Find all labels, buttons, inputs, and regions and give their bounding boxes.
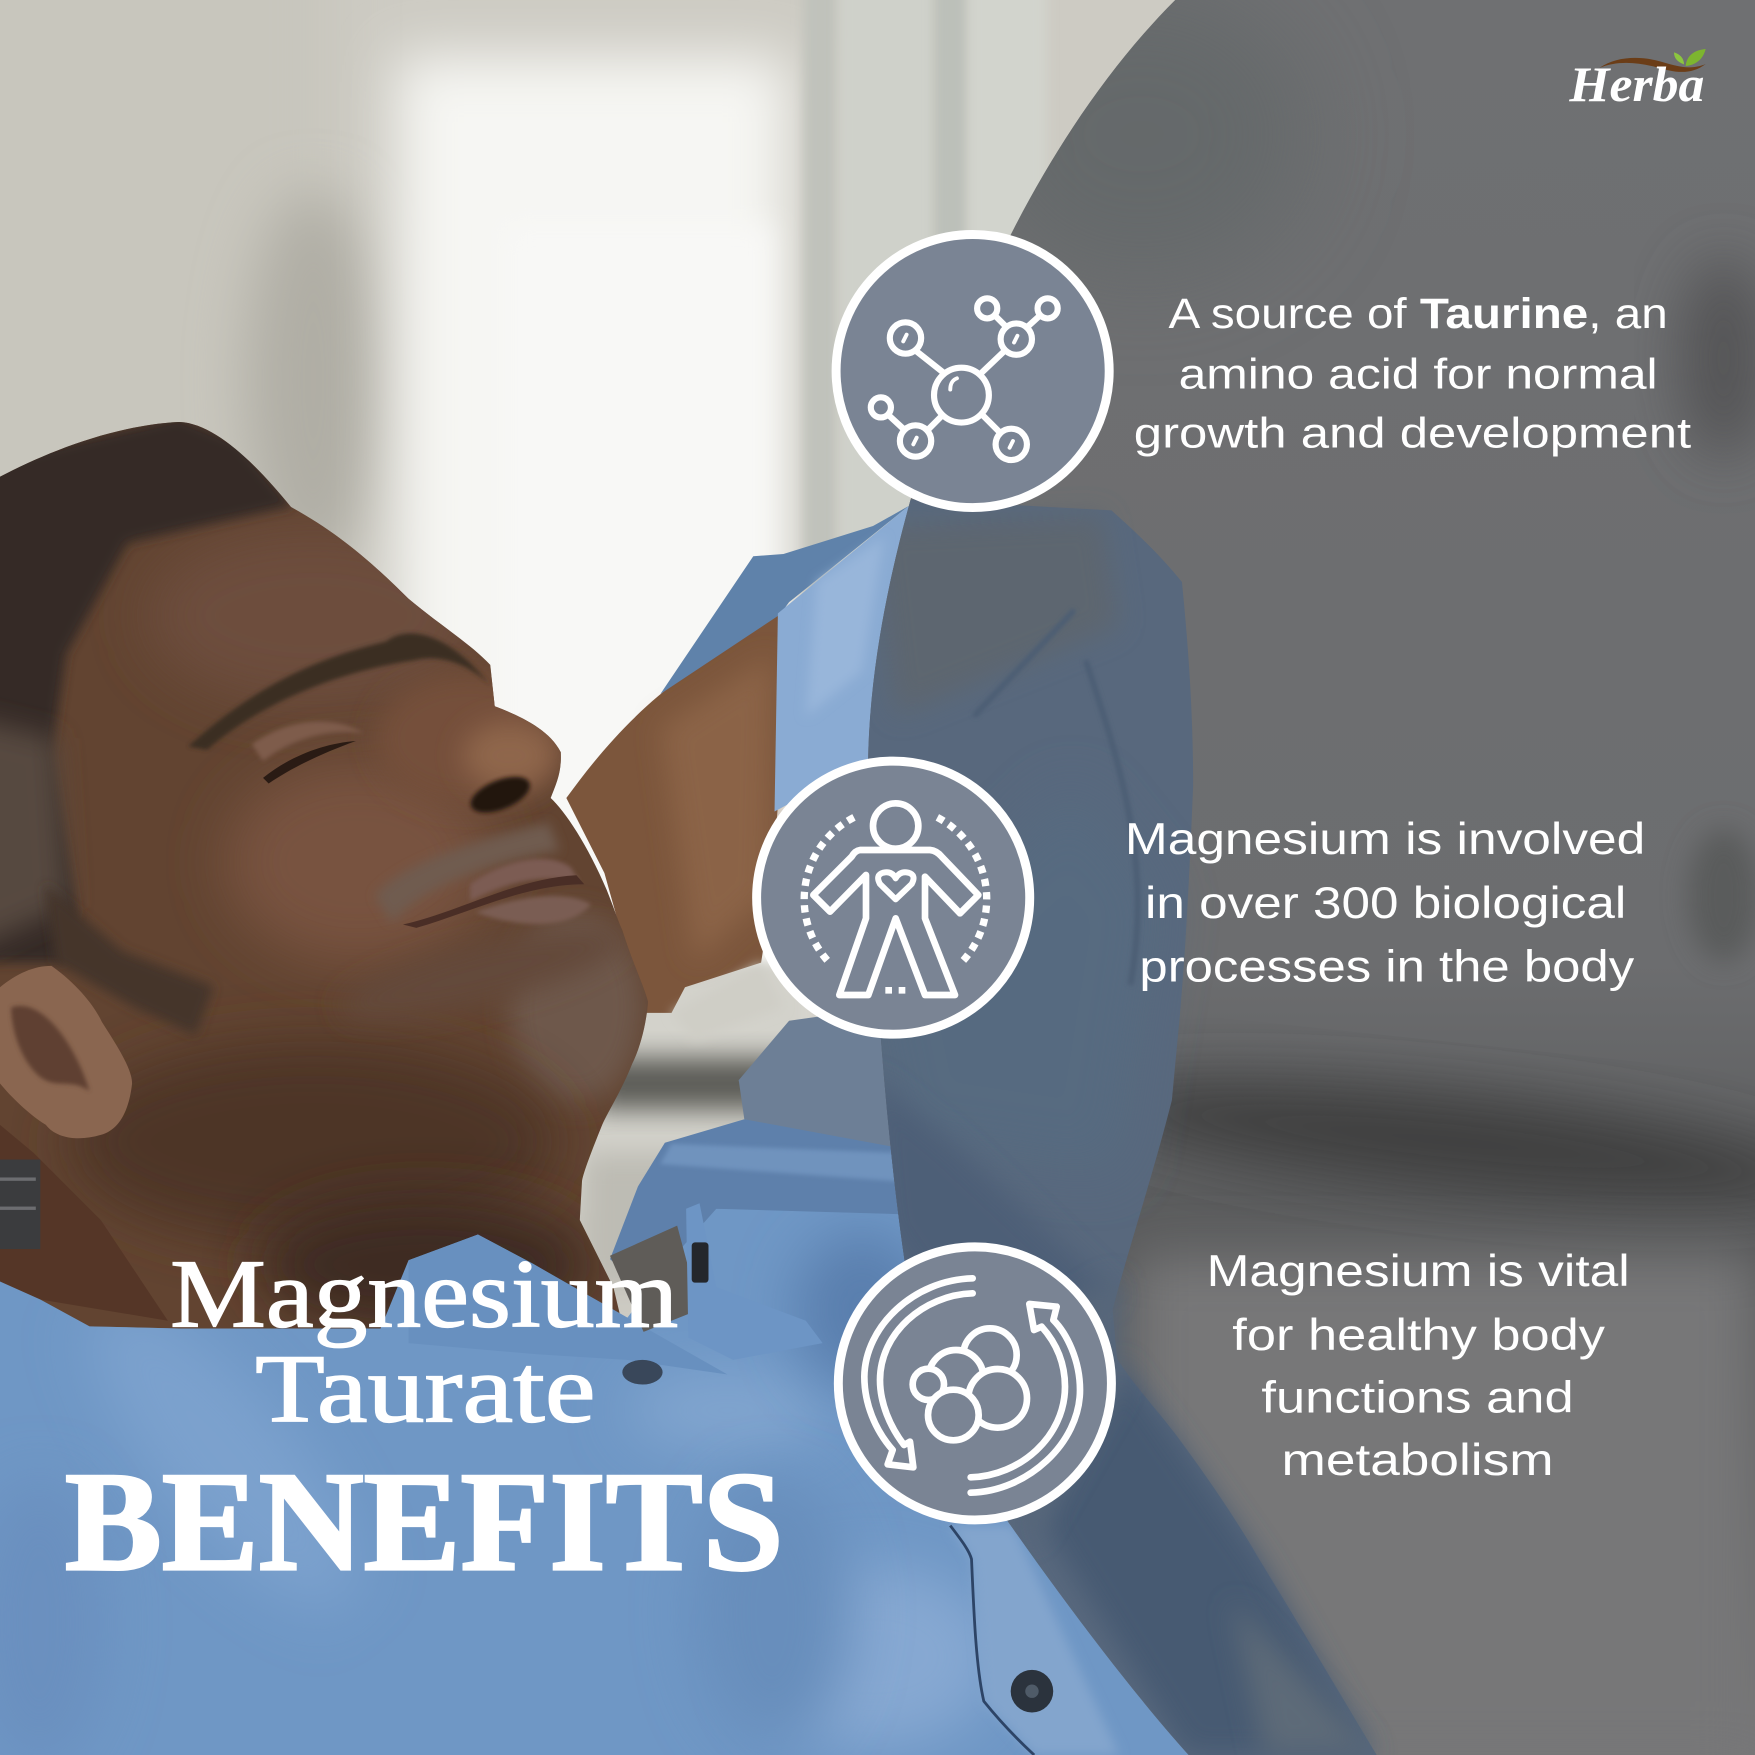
raised sleeve cuff	[660, 506, 909, 811]
title	[65, 1240, 783, 1600]
text block: taurine	[1134, 290, 1691, 458]
moustache shadow	[375, 823, 560, 923]
logo swoosh	[1599, 58, 1706, 72]
text block: magnesium body functions	[1207, 1246, 1630, 1485]
icon: metabolism cycle badge	[838, 1247, 1111, 1520]
forearm behind the head	[566, 614, 783, 1041]
hair	[0, 416, 293, 963]
body glyph	[804, 803, 987, 995]
shirt collar	[409, 1235, 728, 1374]
title: BENEFITS	[65, 1442, 783, 1600]
ear	[0, 966, 132, 1138]
lower sleeve and shoulder	[610, 1016, 898, 1262]
text block: magnesium body functions: metabolism	[1282, 1435, 1554, 1485]
closed eye	[263, 741, 356, 783]
text block: magnesium body functions: Magnesium is vital	[1207, 1246, 1630, 1296]
text block: magnesium biological processes: in over 300 biological	[1145, 878, 1626, 928]
panel: translucent gray curve	[783, 0, 1755, 1755]
nostril	[466, 769, 535, 820]
logo wordmark: Herba	[1568, 57, 1704, 112]
icon: molecule badge	[836, 234, 1109, 508]
title: Magnesium	[170, 1240, 678, 1348]
lips and smile	[470, 859, 580, 901]
text block: magnesium biological processes	[1125, 814, 1645, 992]
icon: human body badge	[757, 761, 1030, 1034]
shirt buttons	[622, 1360, 663, 1385]
text block: magnesium biological processes: processes in the body	[1139, 942, 1635, 992]
text block: taurine: A source of Taurine , an	[1169, 290, 1668, 338]
text block: magnesium biological processes: Magnesium is involved	[1125, 814, 1645, 864]
cycle glyph	[864, 1278, 1080, 1493]
text block: taurine: amino acid for normal	[1179, 350, 1658, 398]
title: Taurate	[255, 1335, 595, 1443]
logo leaves	[1674, 49, 1706, 66]
molecule glyph	[871, 298, 1058, 460]
man's head and neck	[0, 414, 672, 1354]
sideburn	[45, 884, 214, 1035]
hand and watch behind neck	[0, 1125, 168, 1321]
text block: magnesium body functions: functions and	[1261, 1373, 1574, 1423]
background photo: blurred room	[0, 0, 1175, 1318]
text block: magnesium body functions: for healthy body	[1232, 1310, 1606, 1360]
text block: taurine: growth and development	[1134, 410, 1691, 458]
blue shirt	[0, 1097, 1455, 1755]
eyebrow	[188, 633, 490, 750]
sleeve under panel	[783, 492, 1377, 1755]
shirt placket seam	[950, 1526, 1034, 1755]
logo: Herba	[1568, 49, 1706, 112]
